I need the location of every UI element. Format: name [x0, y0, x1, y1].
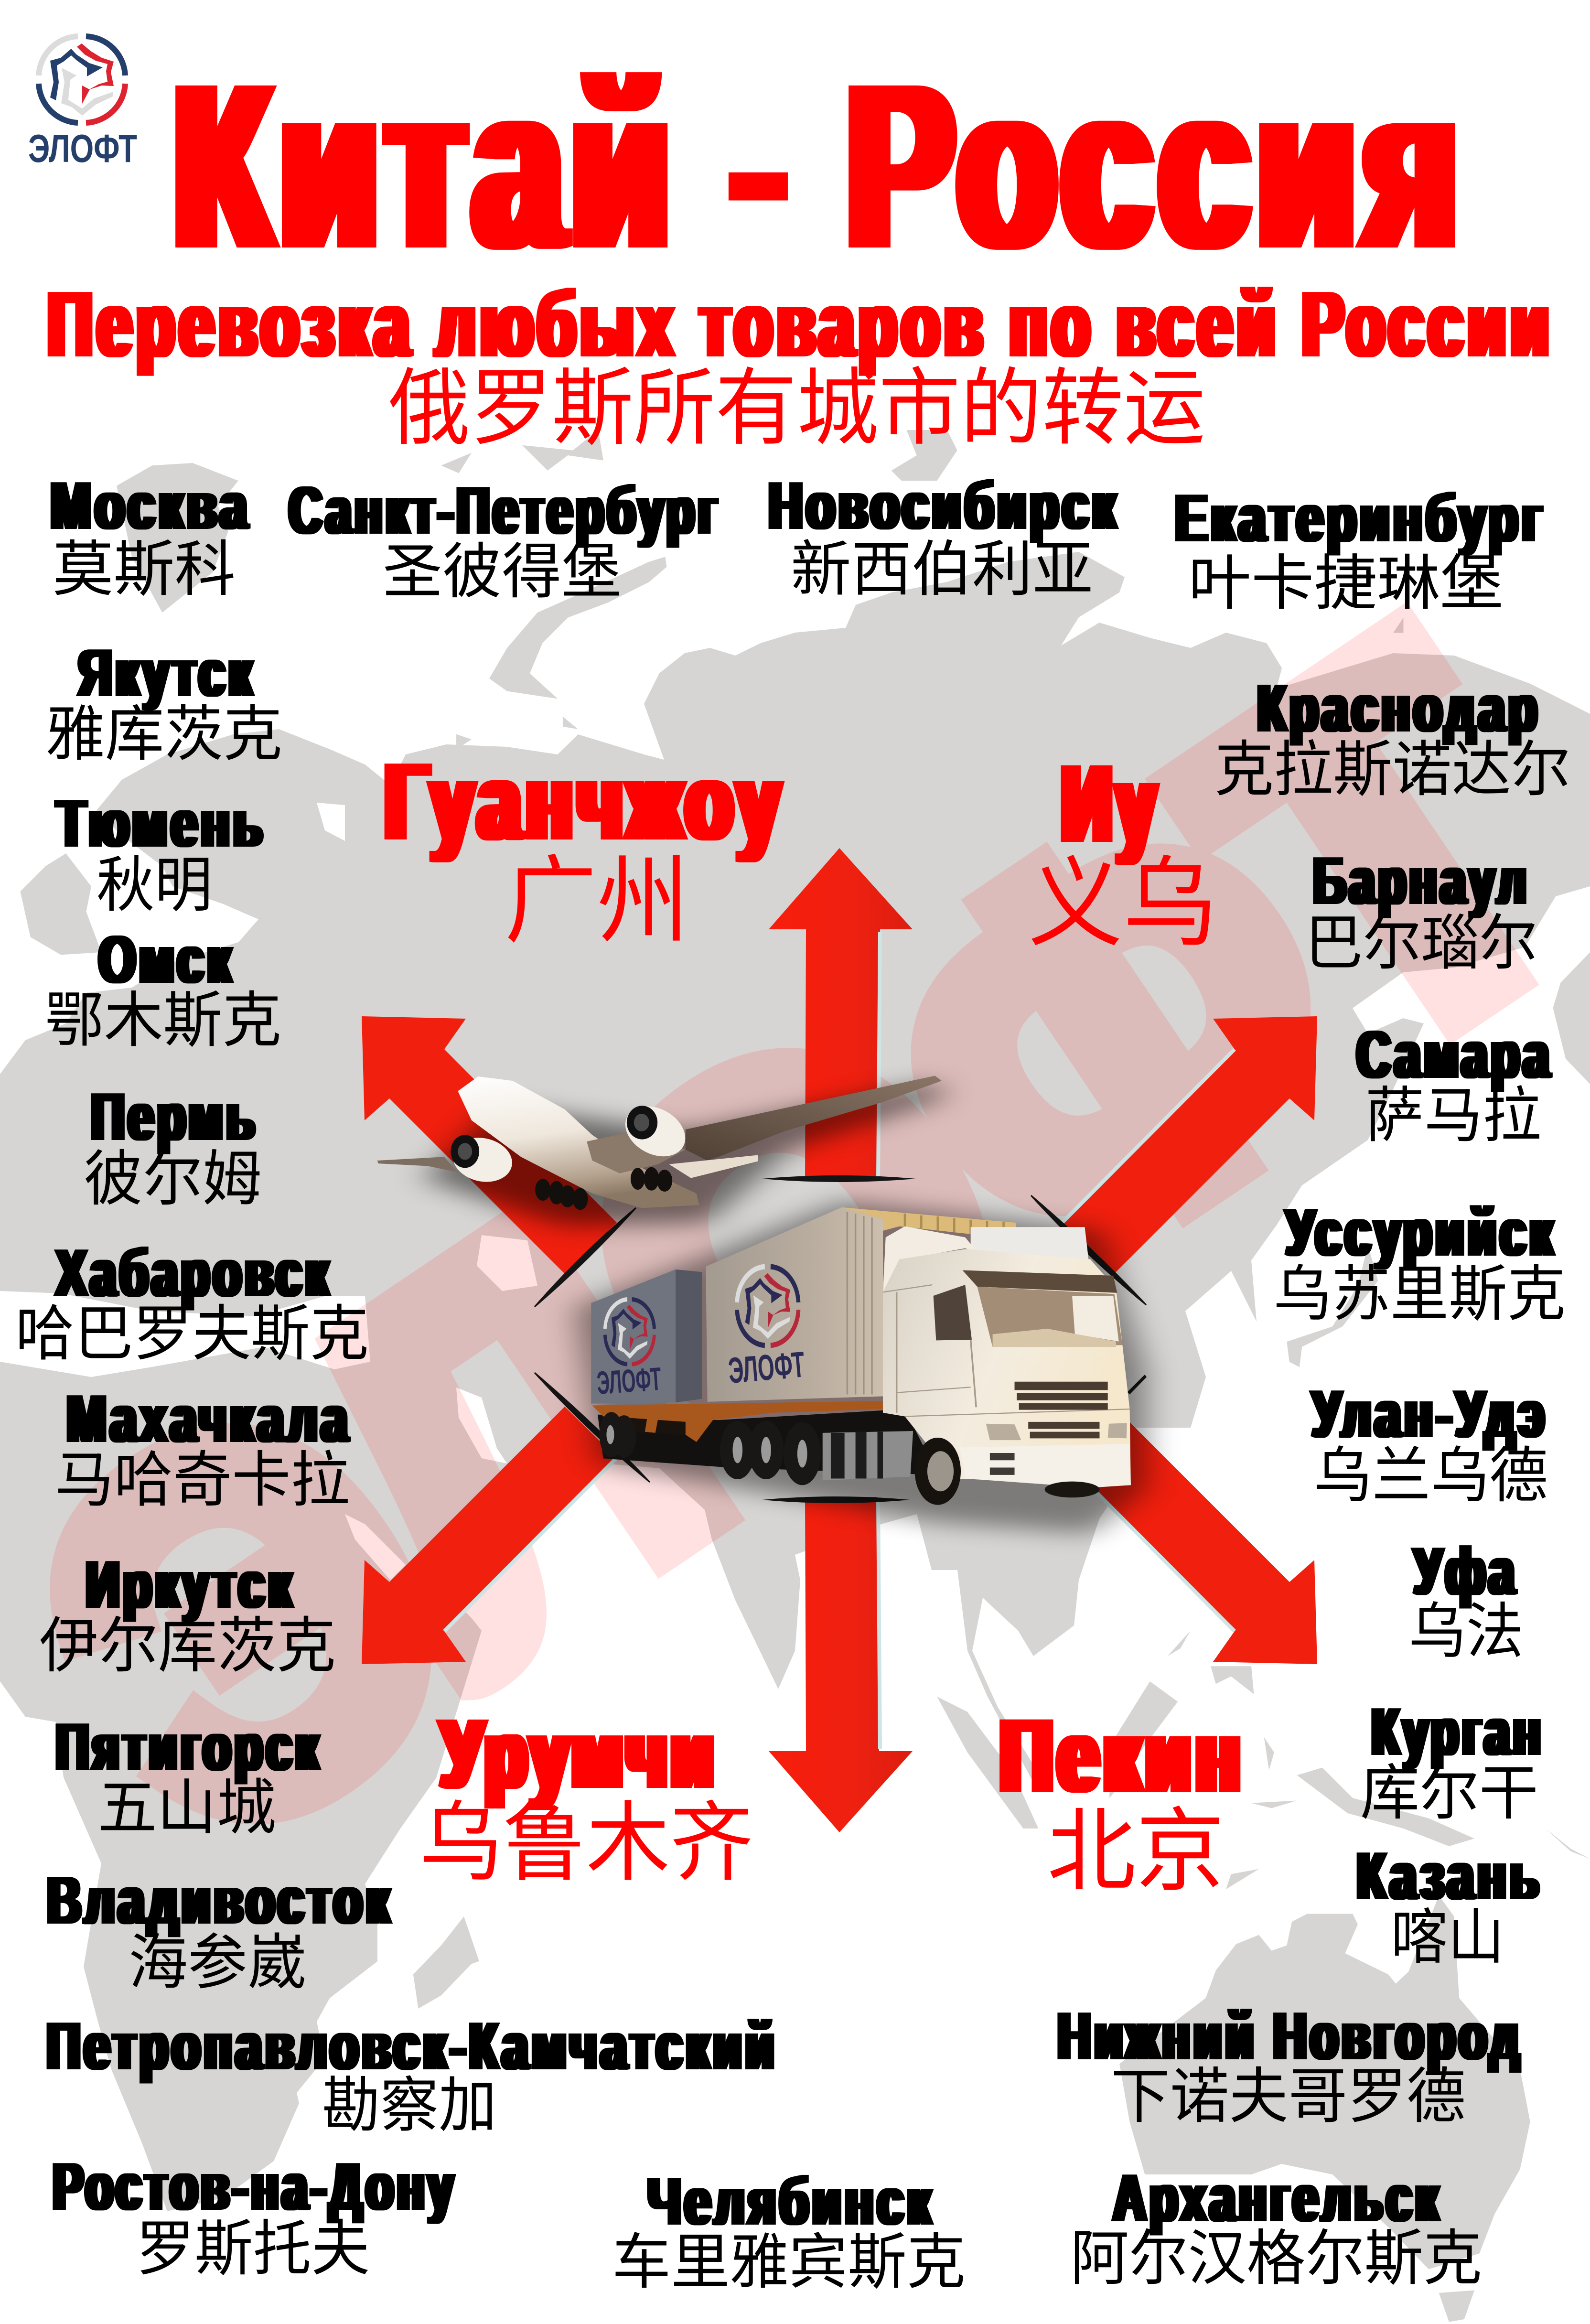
city: Уфа — [1408, 1533, 1524, 1665]
arrow: down-left — [362, 1407, 617, 1664]
arrow: down-right — [1062, 1407, 1317, 1664]
city: Новосибирск: Новосибирск — [769, 468, 1119, 544]
city: Курган: 库尔干 — [1360, 1759, 1538, 1827]
city: Екатеринбург — [1175, 480, 1546, 617]
city: Челябинск — [612, 2163, 966, 2296]
subtitle zh: 俄罗斯所有城市的转运 — [388, 362, 1205, 455]
city: Новосибирск: 新西伯利亚 — [791, 536, 1093, 603]
city: Самара — [1357, 1017, 1553, 1149]
arrow: up-right — [1062, 1016, 1317, 1274]
hub: Урумчи: Урумчи — [441, 1699, 718, 1809]
city: Иркутск — [39, 1547, 336, 1679]
city: Петропавловск-Камчатский — [47, 2008, 778, 2139]
truck text: front: ЭЛОФТ — [727, 1344, 806, 1391]
city: Ростов-на-Дону: Ростов-на-Дону — [53, 2149, 457, 2225]
hub: Гуанчжоу — [385, 740, 785, 955]
city: Махачкала — [55, 1381, 351, 1514]
city: Тюмень: Тюмень — [57, 785, 266, 861]
city: Челябинск: 车里雅宾斯克 — [612, 2228, 966, 2296]
city: Барнаул — [1305, 843, 1537, 977]
city: Уфа: 乌法 — [1408, 1598, 1524, 1665]
city: Махачкала: Махачкала — [67, 1381, 351, 1457]
city: Нижний Новгород — [1058, 1998, 1523, 2130]
city: Санкт-Петербург: 圣彼得堡 — [383, 538, 621, 605]
city: Казань — [1357, 1838, 1543, 1971]
city: Краснодар: 克拉斯诺达尔 — [1214, 736, 1570, 803]
hub: Пекин — [1000, 1697, 1246, 1902]
city: Пермь: Пермь — [91, 1079, 258, 1155]
hub: Пекин: 北京 — [1047, 1801, 1225, 1902]
arrow: up-left — [362, 1016, 617, 1274]
city: Тюмень: 秋明 — [97, 851, 213, 919]
truck logo: rear container — [605, 1300, 654, 1364]
city: Пятигорск: 五山城 — [97, 1774, 276, 1841]
seas painted white — [0, 803, 537, 1580]
city: Москва: Москва — [51, 468, 251, 544]
city: Владивосток: Владивосток — [47, 1862, 393, 1938]
city: Хабаровск — [15, 1235, 369, 1367]
arrow: up — [769, 848, 913, 1181]
city: Уссурийск: 乌苏里斯克 — [1273, 1260, 1566, 1328]
city: Петропавловск-Камчатский: Петропавловск-Камчатский — [47, 2008, 778, 2084]
city: Ростов-на-Дону — [53, 2149, 457, 2282]
city: Уфа: Уфа — [1414, 1533, 1518, 1609]
hub: Гуанчжоу: Гуанчжоу — [385, 740, 785, 863]
hub: Урумчи: 乌鲁木齐 — [419, 1794, 753, 1892]
city: Нижний Новгород: 下诺夫哥罗德 — [1111, 2063, 1466, 2130]
city: Улан-Удэ: 乌兰乌德 — [1313, 1442, 1548, 1509]
city: Хабаровск: Хабаровск — [56, 1235, 332, 1311]
city: Иркутск: 伊尔库茨克 — [39, 1612, 336, 1679]
city: Уссурийск — [1273, 1194, 1566, 1328]
truck text: rear: ЭЛОФТ — [596, 1361, 663, 1401]
city: Москва: 莫斯科 — [53, 536, 236, 603]
city: Владивосток — [47, 1862, 393, 1996]
hub: Гуанчжоу: 广州 — [505, 848, 689, 955]
city: Хабаровск: 哈巴罗夫斯克 — [15, 1300, 369, 1367]
city: Омск: 鄂木斯克 — [45, 987, 281, 1054]
city: Архангельск: Архангельск — [1113, 2160, 1442, 2236]
city: Архангельск: 阿尔汉格尔斯克 — [1070, 2225, 1482, 2292]
city: Пермь: 彼尔姆 — [84, 1145, 262, 1213]
arrow: down — [769, 1497, 913, 1832]
city: Челябинск: Челябинск — [648, 2163, 935, 2239]
city: Владивосток: 海参崴 — [129, 1929, 307, 1996]
city: Архангельск — [1070, 2160, 1482, 2292]
city: Якутск: Якутск — [78, 635, 256, 711]
city: Курган — [1360, 1694, 1544, 1827]
city: Иркутск: Иркутск — [86, 1547, 295, 1623]
city: Казань: 喀山 — [1391, 1904, 1504, 1971]
logo: ЭЛОФТ — [28, 126, 137, 171]
city: Петропавловск-Камчатский: 勘察加 — [322, 2072, 497, 2139]
city: Тюмень — [57, 785, 266, 919]
city: Якутск: 雅库茨克 — [46, 700, 282, 768]
city: Краснодар — [1214, 670, 1570, 803]
city: Омск: Омск — [99, 922, 235, 998]
city: Пятигорск: Пятигорск — [56, 1709, 322, 1785]
truck — [576, 1201, 1146, 1533]
city: Москва — [51, 468, 251, 603]
city: Санкт-Петербург — [289, 473, 720, 605]
city: Махачкала: 马哈奇卡拉 — [55, 1446, 350, 1514]
city: Барнаул: 巴尔瑙尔 — [1305, 909, 1537, 977]
city: Якутск — [46, 635, 282, 768]
city: Екатеринбург: 叶卡捷琳堡 — [1188, 549, 1503, 617]
city: Пермь — [84, 1079, 262, 1213]
hub: Пекин: Пекин — [1000, 1697, 1246, 1814]
city: Самара: 萨马拉 — [1365, 1082, 1541, 1149]
hub: Иу — [1028, 742, 1217, 958]
hub: Иу: Иу — [1062, 742, 1160, 866]
truck logo: front container — [737, 1267, 798, 1345]
city: Санкт-Петербург: Санкт-Петербург — [289, 473, 720, 549]
city: Ростов-на-Дону: 罗斯托夫 — [136, 2215, 370, 2282]
city: Улан-Удэ — [1312, 1376, 1548, 1509]
hub: Урумчи — [419, 1699, 753, 1892]
logo — [28, 36, 137, 171]
plane — [377, 1076, 943, 1227]
city: Омск — [45, 922, 281, 1054]
city: Пятигорск — [56, 1709, 322, 1841]
hub: Иу: 义乌 — [1028, 849, 1217, 958]
city: Новосибирск — [769, 468, 1119, 603]
